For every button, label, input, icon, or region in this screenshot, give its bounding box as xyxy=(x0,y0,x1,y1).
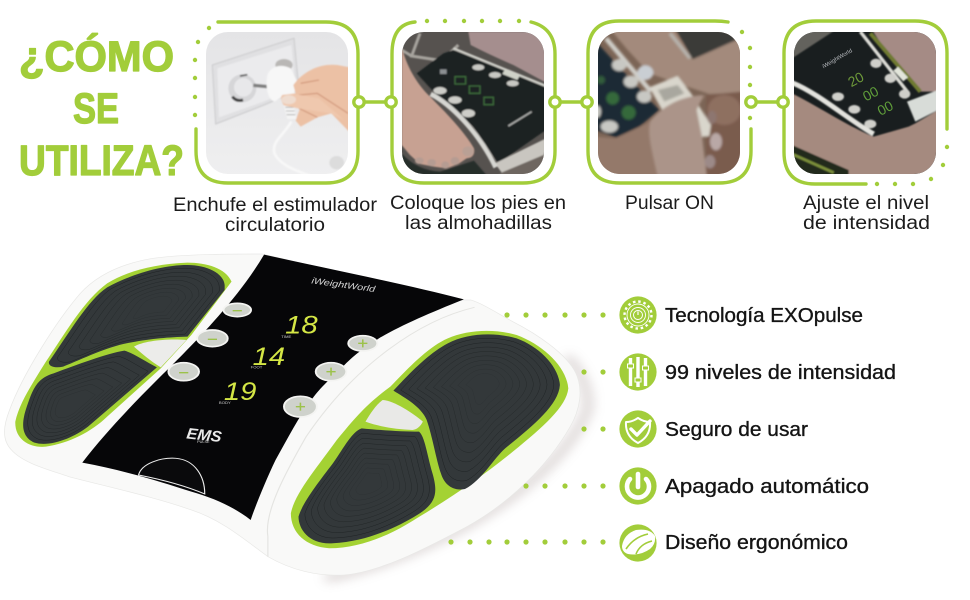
caption step 2 xyxy=(390,193,566,234)
displays: TIME xyxy=(281,334,292,339)
displays xyxy=(219,310,318,406)
photo: adjust intensity: 20 xyxy=(845,68,867,90)
step 2: pies xyxy=(390,19,566,234)
step 3: pulsar on xyxy=(588,21,752,214)
frame step 4 xyxy=(784,21,949,186)
feature: apagado xyxy=(619,467,869,505)
title: UTILIZA? xyxy=(19,137,184,185)
frame step 2 xyxy=(392,19,555,183)
icon: gear xyxy=(619,296,657,334)
EMS logo: EMS xyxy=(185,425,223,446)
dotted leader lines xyxy=(448,312,606,545)
brand: iWeightWorld xyxy=(311,276,377,294)
title: SE xyxy=(73,85,119,133)
step 1: enchufe xyxy=(173,22,378,236)
caption step 4 xyxy=(803,193,930,234)
product: foot massager device xyxy=(4,254,588,578)
caption step 1: circulatorio xyxy=(225,215,325,236)
caption step 3: Pulsar ON xyxy=(625,193,714,214)
right wing rim xyxy=(267,307,475,557)
icon: ergonomic pad xyxy=(619,524,657,562)
feature: diseño xyxy=(619,524,848,562)
caption step 1 xyxy=(173,195,378,236)
control panel xyxy=(82,255,464,520)
photo: adjust intensity: 00 xyxy=(860,83,881,104)
device shadow xyxy=(325,357,588,578)
displays: 14 xyxy=(253,342,285,371)
feature: diseño: Diseño ergonómico xyxy=(665,532,848,554)
photo: adjust intensity xyxy=(792,30,938,176)
EMS logo: PULSE xyxy=(197,440,210,444)
caption step 4: Ajuste el nivel xyxy=(803,193,929,214)
displays: FOOT xyxy=(251,365,263,370)
caption step 4: de intensidad xyxy=(803,213,930,234)
icon: sliders xyxy=(619,353,657,391)
caption step 2: Coloque los pies en xyxy=(390,193,566,214)
feature: tecnología exopulse xyxy=(619,296,863,334)
photo: plug in socket xyxy=(204,30,350,176)
step 4: ajuste xyxy=(784,21,949,234)
title: ¿CÓMO xyxy=(19,32,174,81)
feature: apagado: Apagado automático xyxy=(665,476,869,498)
device body xyxy=(4,254,580,575)
title xyxy=(19,32,184,185)
feature: seguro: Seguro de usar xyxy=(665,419,808,441)
caption step 2: las almohadillas xyxy=(405,213,552,234)
photo: adjust intensity: 00 xyxy=(875,97,896,119)
caption step 1: Enchufe el estimulador xyxy=(173,195,378,216)
displays: 18 xyxy=(285,310,318,339)
displays: 19 xyxy=(224,377,256,406)
frame step 1 xyxy=(193,22,358,183)
connectors between steps xyxy=(354,97,788,107)
right pedal xyxy=(291,331,568,548)
feature: tecnología exopulse: Tecnología EXOpulse xyxy=(665,305,863,327)
displays: BODY xyxy=(219,400,231,405)
frame step 3 xyxy=(588,21,752,183)
feature: 99 niveles: 99 niveles de intensidad xyxy=(665,362,896,384)
feature: 99 niveles xyxy=(619,353,896,391)
photo: remote pressing xyxy=(594,30,742,176)
photo: adjust intensity: iWeightWorld xyxy=(822,48,854,70)
icon: power xyxy=(619,467,657,505)
panel buttons xyxy=(168,303,377,417)
icon: shield check xyxy=(619,410,657,448)
photo: feet on pads xyxy=(400,30,546,176)
feature: seguro xyxy=(619,410,808,448)
left pedal xyxy=(15,263,232,447)
half circle button xyxy=(139,458,205,494)
